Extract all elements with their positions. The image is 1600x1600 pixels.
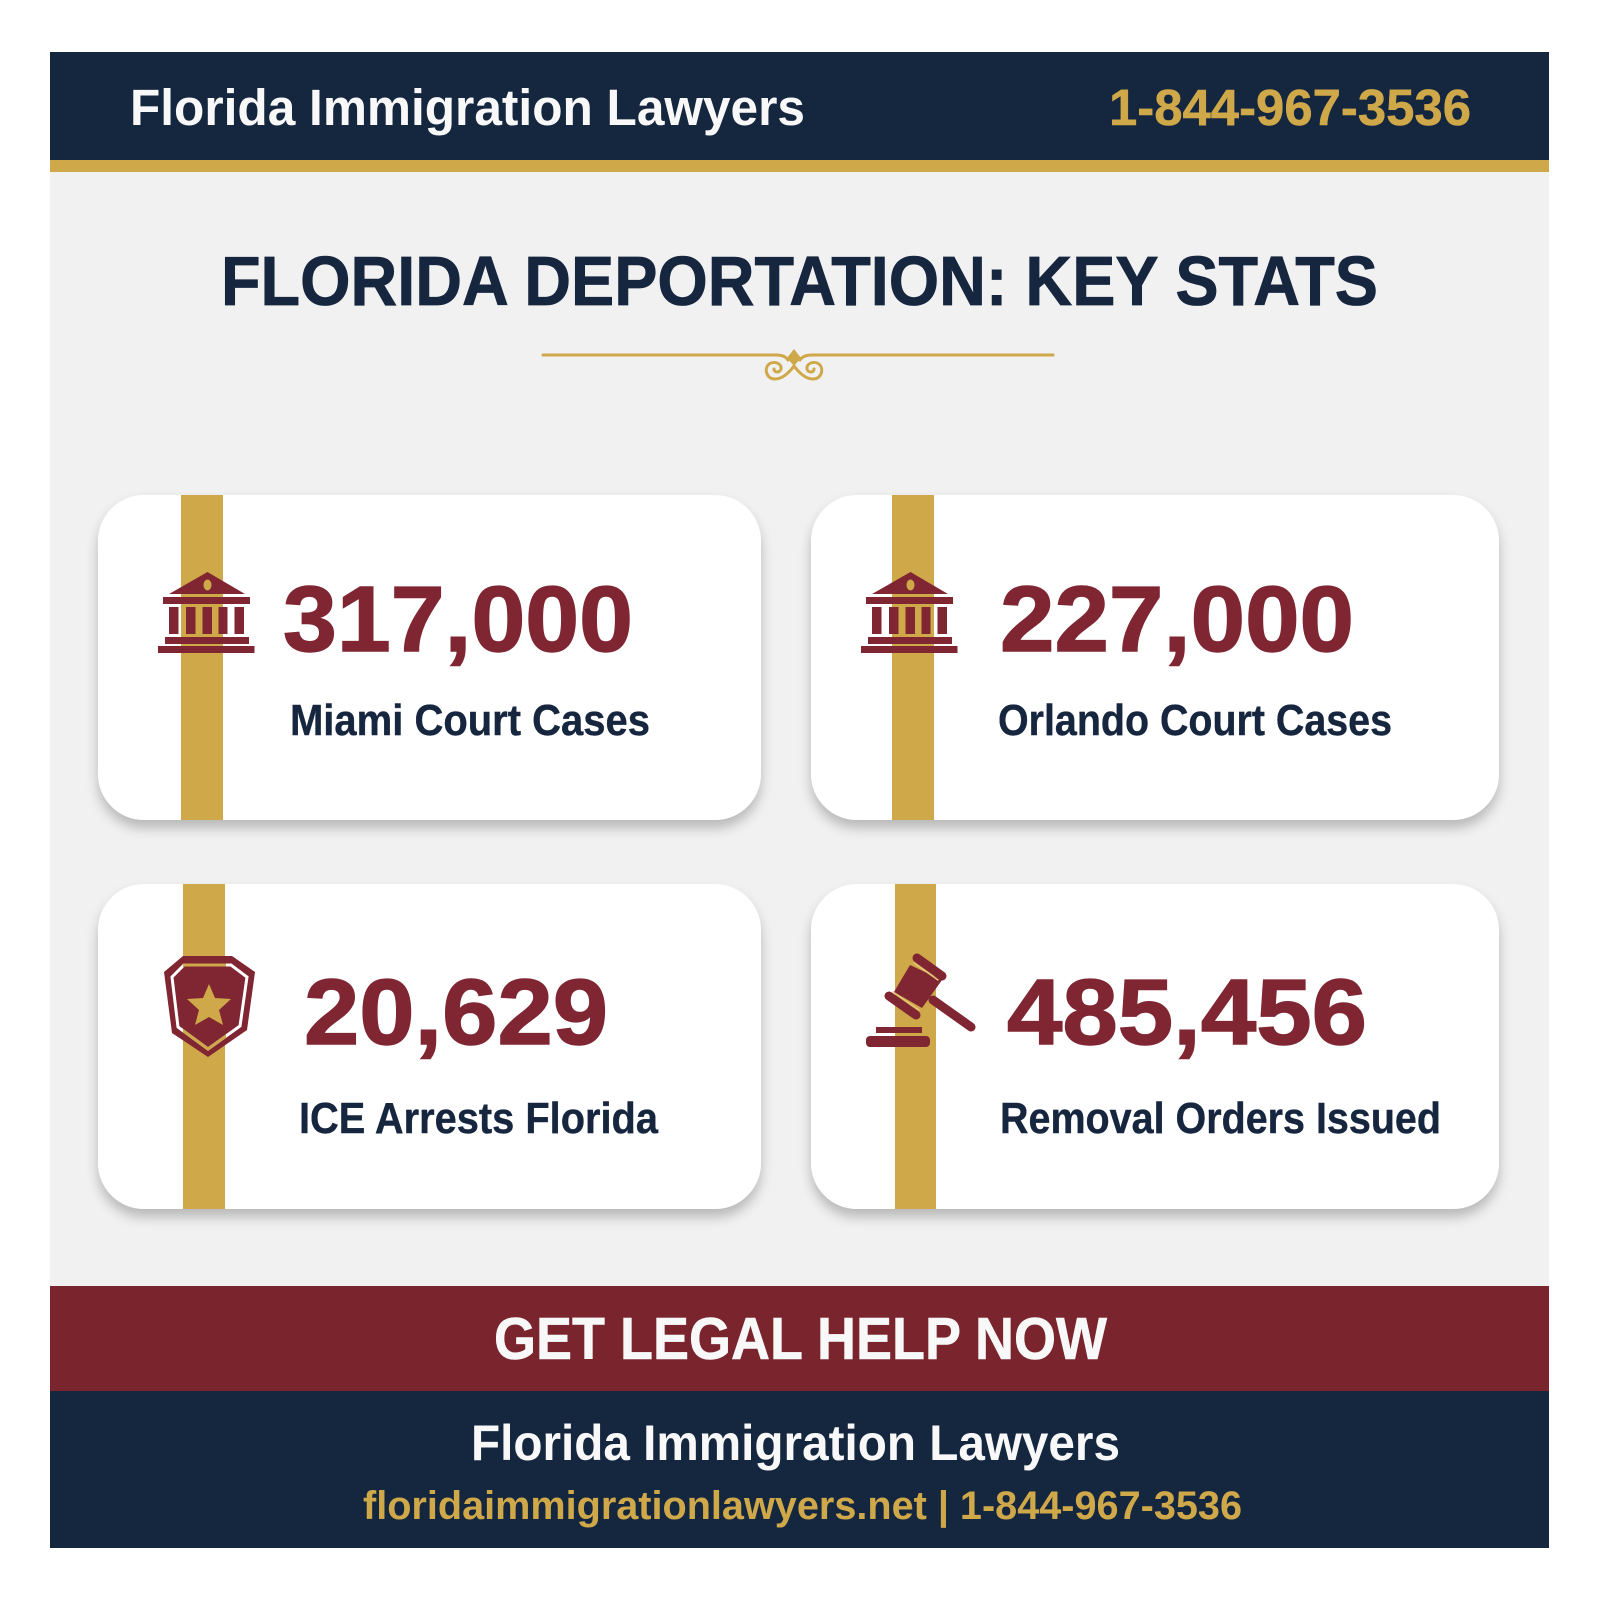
- header navy band: [50, 52, 1549, 160]
- label: Orlando Court Cases: Orlando Court Cases: [998, 696, 1392, 745]
- call to action band: [50, 1286, 1549, 1391]
- icon: badge shield: [164, 956, 255, 1057]
- header gold rule: [50, 160, 1549, 172]
- icon: courthouse: [158, 572, 254, 653]
- icon: courthouse: [861, 572, 958, 653]
- ornamental divider: [543, 349, 1053, 379]
- gold vertical bar: [183, 884, 225, 1209]
- red band background: [50, 1286, 1549, 1391]
- gold vertical bar: [892, 495, 934, 820]
- stat: 317,000: 317,000: [283, 567, 633, 671]
- label: Removal Orders Issued: Removal Orders Issued: [1000, 1094, 1441, 1143]
- header firm name: Florida Immigration Lawyers: [130, 79, 805, 136]
- title: FLORIDA DEPORTATION: KEY STATS: [221, 242, 1378, 320]
- card: Miami court cases: [98, 495, 761, 820]
- footer website and phone: floridaimmigrationlawyers.net | 1-844-967-3536: [363, 1484, 1242, 1528]
- card background: [811, 495, 1499, 820]
- card background: [98, 495, 761, 820]
- card background: [811, 884, 1499, 1209]
- call to action text: GET LEGAL HELP NOW: [494, 1306, 1107, 1372]
- footer firm name: Florida Immigration Lawyers: [471, 1415, 1120, 1471]
- card background: [98, 884, 761, 1209]
- footer navy background: [50, 1391, 1549, 1548]
- stat: 485,456: 485,456: [1007, 960, 1367, 1064]
- label: ICE Arrests Florida: ICE Arrests Florida: [299, 1094, 658, 1143]
- card: removal orders issued: [811, 884, 1499, 1209]
- gold vertical bar: [895, 884, 936, 1209]
- footer: [50, 1391, 1549, 1548]
- icon: gavel: [866, 958, 971, 1047]
- card: ICE arrests Florida: [98, 884, 761, 1209]
- gold vertical bar: [181, 495, 223, 820]
- stat: 20,629: 20,629: [304, 960, 608, 1064]
- card: Orlando court cases: [811, 495, 1499, 820]
- label: Miami Court Cases: Miami Court Cases: [290, 696, 650, 745]
- header phone number: 1-844-967-3536: [1109, 79, 1471, 136]
- stat: 227,000: 227,000: [1000, 567, 1354, 671]
- header bar: [50, 52, 1549, 172]
